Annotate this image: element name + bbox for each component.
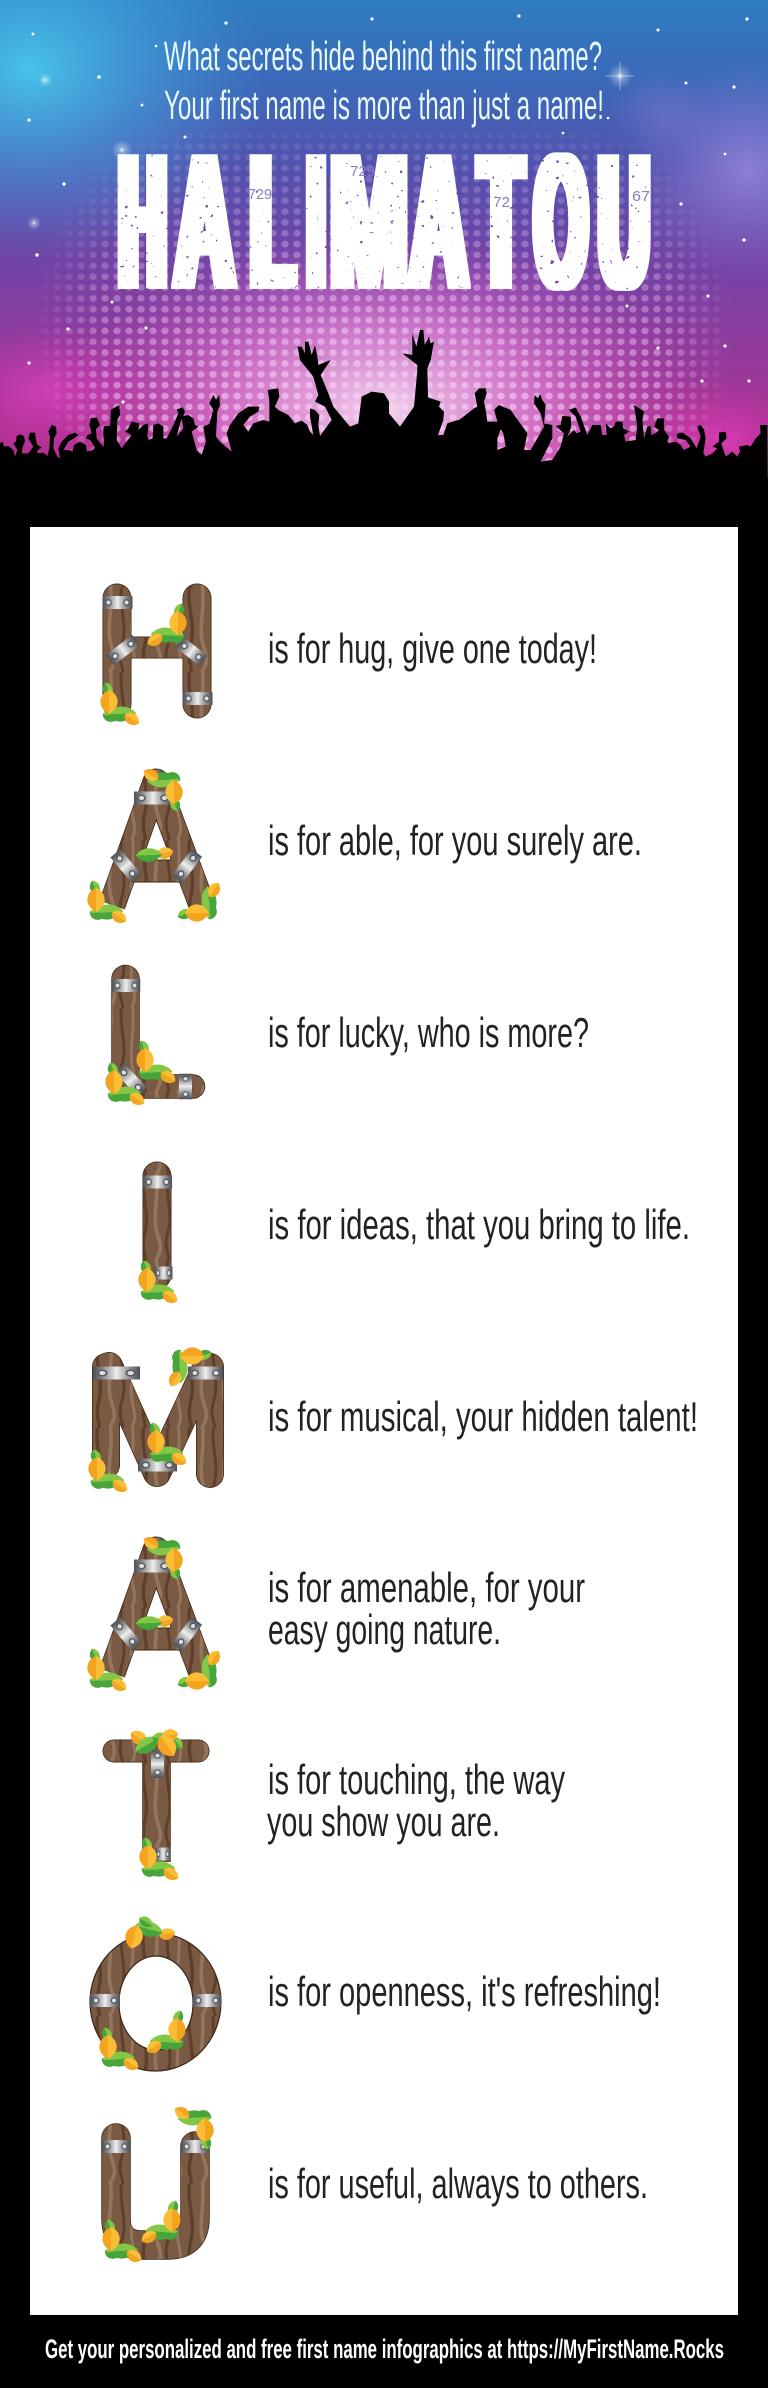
- row: U: [102, 2104, 648, 2265]
- name title: L: [251, 116, 294, 328]
- text: H: is for hug, give one today!: [268, 625, 597, 672]
- text: T: is for touching, the way: [268, 1756, 565, 1803]
- header banner: [0, 0, 768, 478]
- letter M icon: [88, 1347, 223, 1495]
- header tagline: [164, 33, 604, 128]
- name title: H: [119, 116, 166, 328]
- text: T: you show you are.: [267, 1798, 500, 1845]
- row: A: [87, 766, 642, 926]
- name title: T: [480, 116, 522, 328]
- letter A icon: [87, 766, 223, 926]
- text: A second: easy going nature.: [268, 1606, 501, 1653]
- text: T: [267, 1756, 565, 1845]
- letter U icon: [102, 2104, 214, 2265]
- text: L: is for lucky, who is more?: [268, 1009, 589, 1056]
- letter I icon: [138, 1176, 180, 1306]
- panel: letter list: [30, 527, 738, 2315]
- title distress numerals: 729: [350, 163, 375, 180]
- name title: [119, 116, 649, 328]
- name title: A: [175, 116, 234, 328]
- row: M: [88, 1347, 698, 1495]
- row: T: [114, 1727, 565, 1883]
- letter T icon: [114, 1727, 198, 1883]
- name title: O: [535, 116, 587, 328]
- text: U: [599, 116, 649, 328]
- text: A second: is for amenable, for your: [268, 1564, 585, 1611]
- letter L icon: [105, 979, 193, 1108]
- title distress numerals: 67: [632, 188, 650, 205]
- name title: M: [330, 116, 408, 328]
- name title: I: [308, 116, 324, 328]
- letter O icon: [90, 1914, 221, 2073]
- title distress numerals: 72: [493, 194, 510, 211]
- row: H: [100, 596, 597, 728]
- name title: A: [410, 116, 467, 328]
- text: A second: [268, 1564, 585, 1653]
- row: O: [90, 1914, 661, 2073]
- title distress numerals: [248, 163, 650, 211]
- crowd silhouette: [0, 330, 768, 530]
- title distress numerals: 729: [248, 186, 272, 203]
- sparkles: [27, 14, 751, 404]
- letter A icon second: [87, 1534, 223, 1694]
- row: A second: [87, 1534, 585, 1694]
- row: I: [138, 1176, 690, 1306]
- letter H icon: [100, 596, 212, 728]
- row: L: [105, 979, 589, 1108]
